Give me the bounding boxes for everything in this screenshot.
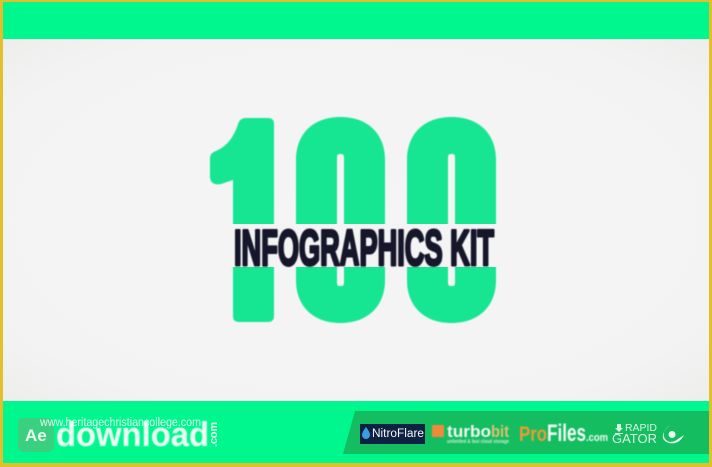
icon: Ae badge xyxy=(18,418,54,452)
wordmark: download: download xyxy=(56,416,209,454)
logo: turbobit xyxy=(432,423,509,445)
digit: 1 xyxy=(210,118,274,322)
turbobit tagline: unlimited & fast cloud storage xyxy=(447,439,509,445)
NitroFlare background xyxy=(360,424,425,444)
wordmark suffix: .com: .com xyxy=(208,422,220,447)
graphic: big number 100 xyxy=(210,117,496,323)
title: INFOGRAPHICS KIT: INFOGRAPHICS KIT xyxy=(234,220,494,276)
turbo text: turbo xyxy=(447,423,491,441)
GATOR text: GATOR xyxy=(612,432,657,446)
digit: first 0 xyxy=(296,117,385,323)
panel: dark green sponsor strip xyxy=(343,411,709,454)
panel: top green band xyxy=(3,2,709,39)
badge text: Ae: Ae xyxy=(25,426,47,445)
title band knockout xyxy=(228,224,503,267)
Pro: Pro xyxy=(519,423,547,446)
bit text: bit xyxy=(491,423,509,441)
logo: Ae download xyxy=(18,416,220,454)
icon: gator swirl xyxy=(663,424,684,443)
logo: Rapid Gator xyxy=(612,422,684,446)
icon: water drop xyxy=(362,427,370,439)
icon: turbobit square xyxy=(432,425,444,437)
RAPID text: RAPID xyxy=(625,422,657,434)
icon: download arrow xyxy=(615,424,623,434)
logo: NitroFlare xyxy=(360,424,425,444)
NitroFlare text: NitroFlare xyxy=(372,428,424,440)
logo: ProFiles.com xyxy=(519,420,608,447)
.com: .com xyxy=(586,432,608,444)
Files: Files xyxy=(547,420,586,447)
watermark url: www.heritagechristiancollege.com xyxy=(39,417,201,429)
panel: central light background xyxy=(3,39,709,401)
digit: second 0 xyxy=(407,117,496,323)
panel: bottom green footer xyxy=(3,401,709,463)
